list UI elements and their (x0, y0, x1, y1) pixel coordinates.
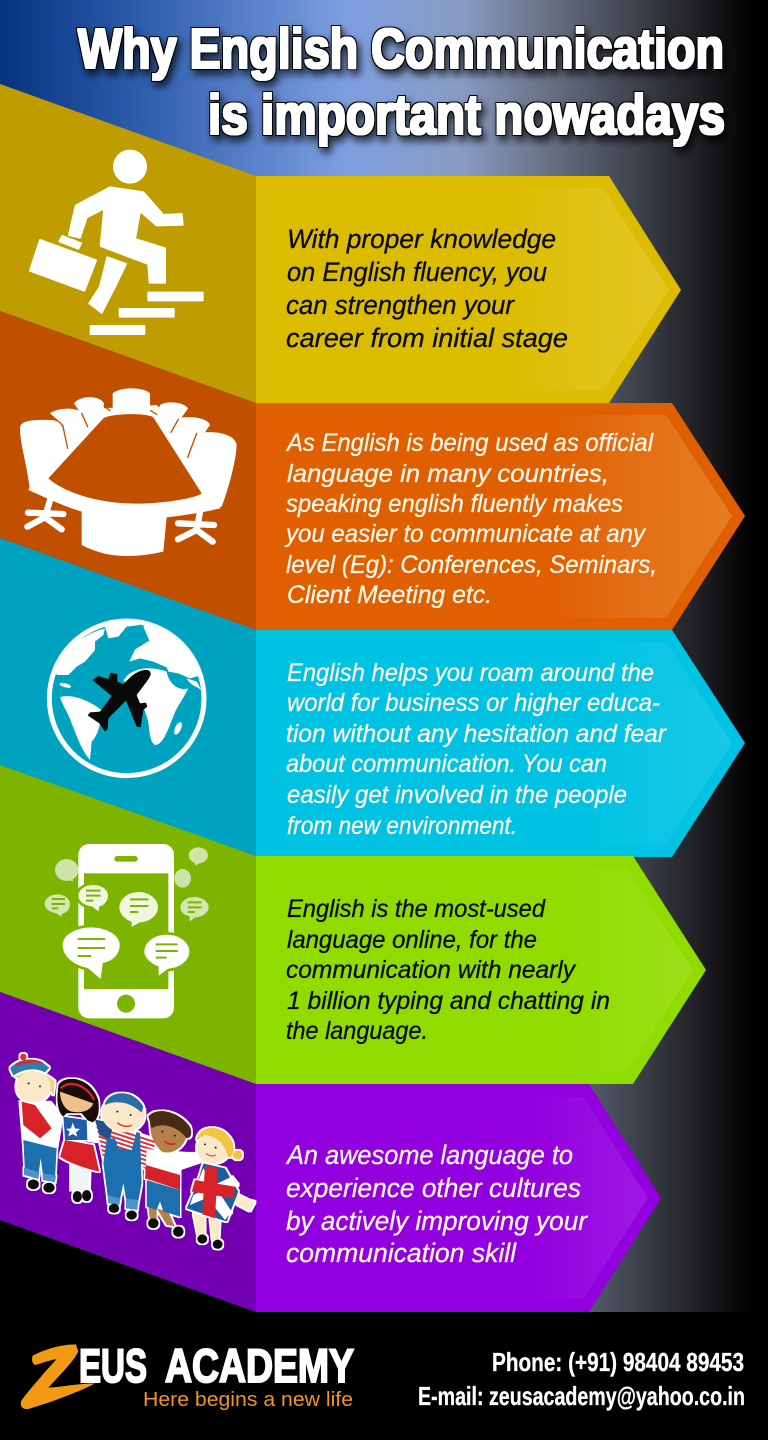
panel: cultures (0, 992, 661, 1312)
text: cultures: communication skill (286, 1238, 517, 1268)
logo: Zeus Academy: ACADEMY (165, 1339, 354, 1392)
text: career: on English fluency, you (287, 257, 547, 287)
text: cultures: experience other cultures (286, 1173, 581, 1203)
text: online: language online, for the (287, 926, 537, 954)
panel: official language (0, 311, 745, 630)
title (78, 17, 725, 147)
text: travel: world for business or higher educa- (287, 689, 660, 717)
text: travel (286, 659, 668, 840)
panel: career (0, 84, 681, 403)
icon: children of many nations (10, 1054, 255, 1249)
text: official language: level (Eg): Conferences, Seminars, (286, 551, 657, 579)
text: official language: you easier to communicate at any (284, 520, 646, 548)
text: travel: easily get involved in the people (287, 781, 627, 809)
text: cultures: by actively improving your (286, 1206, 588, 1236)
logo: Zeus Academy (21, 1339, 354, 1411)
contact details (418, 1347, 745, 1411)
logo: Zeus Academy: Here begins a new life (143, 1389, 353, 1411)
text: travel: about communication. You can (286, 750, 607, 778)
text: cultures: An awesome language to (285, 1140, 573, 1170)
text: career (286, 224, 568, 353)
text: online: communication with nearly (286, 956, 576, 984)
child: Poland (145, 1111, 202, 1237)
text: official language: language in many countries, (287, 460, 609, 488)
icon: climbing stairs (30, 151, 203, 334)
icon: phone with chat bubbles (43, 844, 210, 1018)
text: career: With proper knowledge (287, 224, 556, 254)
panel: online (0, 765, 706, 1084)
text: official language: As English is being used as official (285, 429, 654, 457)
footer (0, 1312, 768, 1440)
text: official language: Client Meeting etc. (287, 581, 492, 609)
icon: globe with plane (49, 621, 204, 776)
child: USA (95, 1093, 157, 1220)
child: Canada (10, 1054, 99, 1202)
text: online: the language. (286, 1017, 428, 1045)
child: United Kingdom (187, 1128, 255, 1249)
text: online: English is the most-used (287, 895, 546, 923)
text: official language (284, 429, 657, 609)
text: travel: tion without any hesitation and fear (286, 720, 668, 748)
text: career: career from initial stage (286, 323, 568, 353)
panel: travel (0, 538, 745, 857)
text: travel: English helps you roam around the (287, 659, 654, 687)
text: travel: from new environment. (287, 812, 517, 840)
text: official language: speaking english fluently makes (286, 490, 623, 518)
text: online (286, 895, 610, 1045)
bottom left black corner (0, 1220, 256, 1312)
text: cultures (285, 1140, 588, 1268)
text: career: can strengthen your (286, 290, 515, 320)
text: online: 1 billion typing and chatting in (287, 987, 610, 1015)
icon: conference table (20, 388, 237, 556)
logo: Zeus Academy: EUS (79, 1339, 147, 1392)
